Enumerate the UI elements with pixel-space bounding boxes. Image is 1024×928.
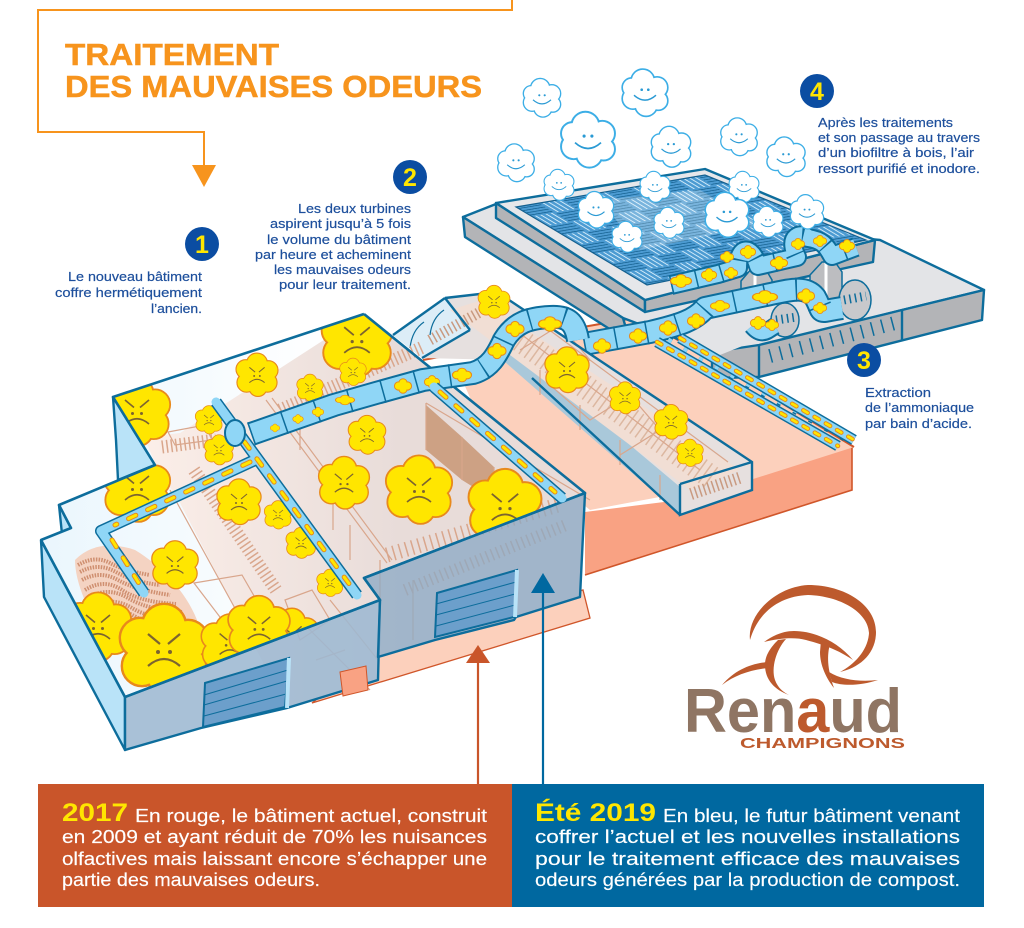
- step 3 badge: [847, 343, 881, 377]
- front wall left section: [125, 600, 380, 750]
- step 4 text: ressort purifié et inodore.: [818, 161, 980, 176]
- step 1 text: l’ancien.: [151, 301, 202, 316]
- biofilter: [496, 169, 875, 312]
- front wall right section: [364, 493, 585, 657]
- internal main duct: [251, 317, 578, 434]
- logo: Renaud Champignons: CHAMPIGNONS: [740, 735, 905, 752]
- right door: [435, 570, 517, 637]
- red pointer arrow: [466, 645, 490, 784]
- step 2 text: aspirent jusqu’à 5 fois: [270, 216, 412, 231]
- panel: 2017: En rouge, le bâtiment actuel, construit: [135, 806, 487, 826]
- step 4 text: [818, 115, 981, 176]
- title: DES MAUVAISES ODEURS: [65, 69, 482, 104]
- ladder duct along red roof: [657, 338, 854, 446]
- new blue building: [41, 304, 590, 750]
- air stacks and fans: [741, 262, 871, 337]
- upper duct on biofilter: [671, 235, 856, 287]
- step 2 text: Les deux turbines: [298, 201, 412, 216]
- step 4 text: et son passage au travers: [818, 130, 981, 145]
- panel: 2017: [38, 784, 512, 907]
- title: [65, 37, 482, 104]
- panel: Été 2019: En bleu, le futur bâtiment venant: [663, 806, 960, 826]
- step 2 text: [255, 201, 412, 292]
- concrete pad: [463, 204, 984, 378]
- step 3 text: de l’ammoniaque: [865, 400, 974, 415]
- small red box: [340, 666, 368, 696]
- left door: [203, 658, 289, 727]
- step 4 badge: [800, 74, 834, 108]
- roof and interior: [41, 314, 585, 697]
- step 2 text: par heure et acheminent: [255, 247, 411, 262]
- panel: 2017: olfactives mais laissant encore s’échapper une: [62, 849, 487, 869]
- existing red building footprint: [312, 317, 854, 703]
- happy clean-air clouds: [498, 70, 823, 252]
- compost pile: [75, 546, 197, 650]
- step 1 badge: 1: [195, 231, 209, 259]
- panel: Été 2019: [512, 784, 984, 907]
- conveyor tunnel: [393, 292, 752, 515]
- panel: Été 2019: Été 2019: [535, 798, 656, 827]
- panel: 2017: 2017: [62, 799, 128, 827]
- step 1 text: [55, 269, 202, 316]
- step 2 badge: [393, 160, 427, 194]
- step 3 text: [865, 385, 974, 431]
- step 4 badge: 4: [810, 78, 824, 106]
- step 2 badge: 2: [403, 164, 417, 192]
- step 2 text: le volume du bâtiment: [267, 232, 411, 247]
- logo: Renaud Champignons: Renaud: [684, 677, 902, 746]
- title: TRAITEMENT: [65, 37, 279, 72]
- step 3 text: Extraction: [865, 385, 931, 400]
- panel: 2017: en 2009 et ayant réduit de 70% les nuisances: [62, 827, 487, 847]
- branch pipes with small odour particles: [101, 387, 562, 595]
- angry clouds inside building: [66, 304, 540, 694]
- step 3 text: par bain d’acide.: [865, 416, 972, 431]
- roof outline: [41, 314, 585, 697]
- panel: Été 2019: coffrer l’actuel et les nouvelles installations: [535, 827, 960, 847]
- step 2 text: les mauvaises odeurs: [274, 262, 412, 277]
- step 4 text: d’un biofiltre à bois, l’air: [818, 145, 975, 160]
- step 2 text: pour leur traitement.: [279, 277, 411, 292]
- left wall: [41, 397, 155, 750]
- step 1 text: Le nouveau bâtiment: [68, 269, 202, 284]
- logo: Renaud Champignons: [684, 585, 905, 752]
- step 1 badge: [185, 227, 219, 261]
- panel: Été 2019: pour le traitement efficace des mauvaises: [535, 849, 960, 869]
- orange frame line with arrow: [38, 0, 512, 187]
- angry clouds in the tunnel: [479, 286, 703, 466]
- panel: Été 2019: odeurs générées par la production de compost.: [535, 870, 960, 890]
- step 4 text: Après les traitements: [818, 115, 954, 130]
- blue pointer arrow: [531, 573, 555, 784]
- panel: 2017: partie des mauvaises odeurs.: [62, 870, 320, 890]
- existing building interior: [144, 314, 590, 708]
- lower duct to fans: [584, 289, 842, 353]
- step 3 badge: 3: [857, 347, 871, 375]
- step 1 text: coffre hermétiquement: [55, 285, 202, 300]
